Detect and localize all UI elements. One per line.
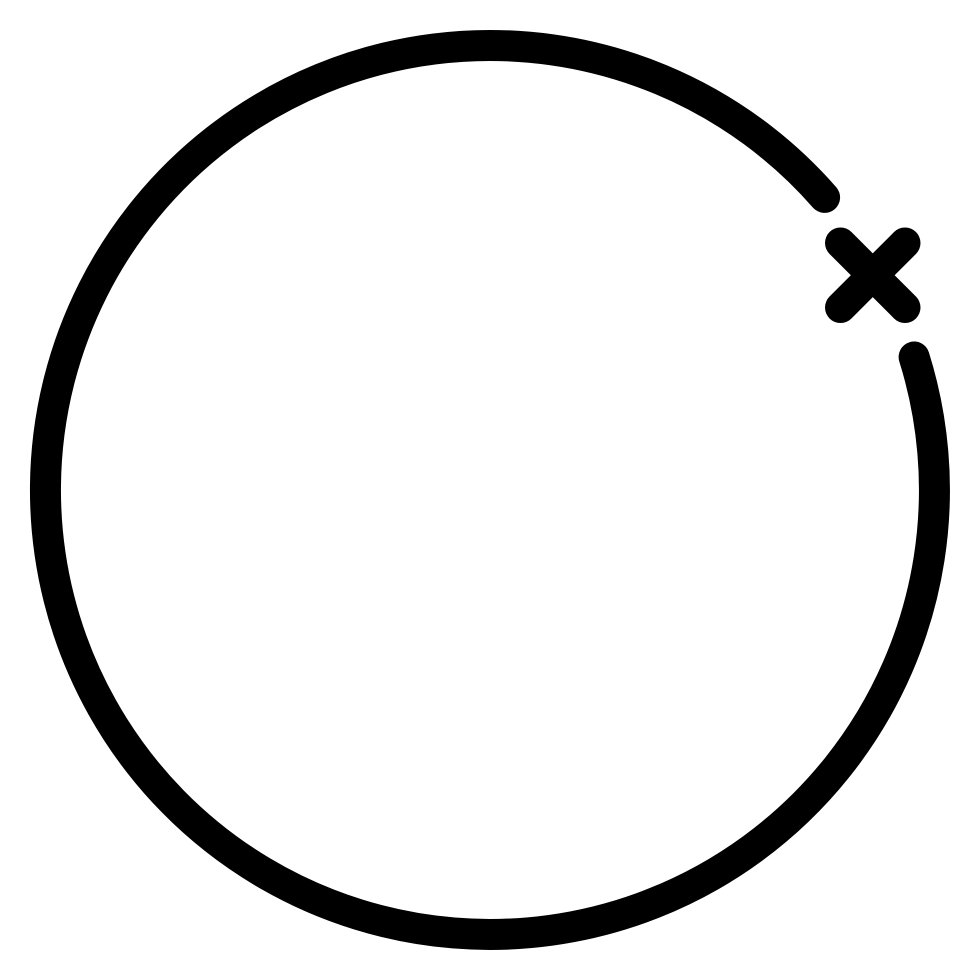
icon: small cross mark (840, 243, 905, 308)
